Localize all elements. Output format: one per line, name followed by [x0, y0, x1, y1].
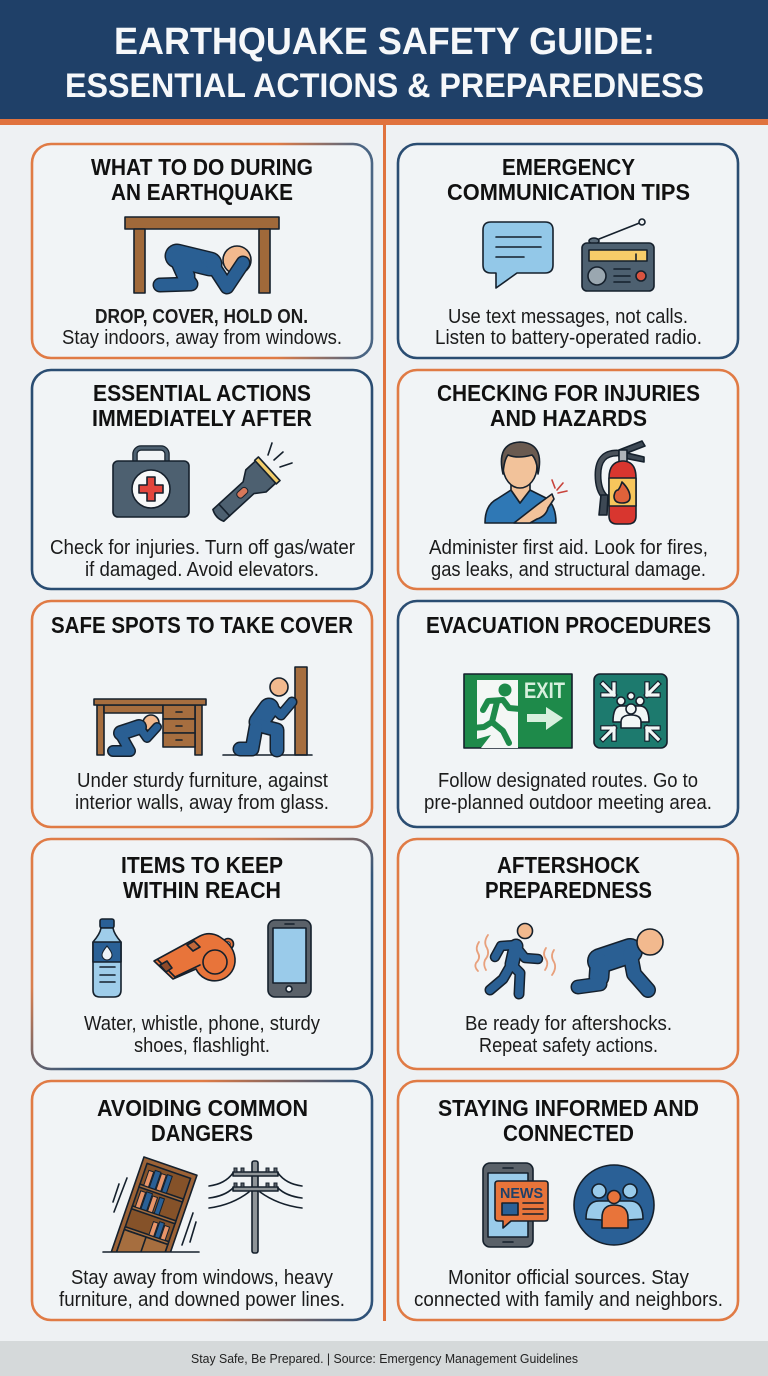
heading: ITEMS TO KEEP	[121, 852, 283, 878]
icon: fire extinguisher	[598, 441, 645, 524]
heading: IMMEDIATELY AFTER	[92, 405, 312, 431]
panel: emergency communication tips	[398, 144, 738, 358]
icon: falling bookcase	[102, 1156, 200, 1253]
body text: Be ready for aftershocks.	[465, 1013, 672, 1035]
icon: person under table	[125, 217, 279, 293]
body text	[75, 770, 329, 814]
icon: smartphone	[268, 920, 311, 997]
body text: Under sturdy furniture, against	[77, 770, 328, 792]
body text: Monitor official sources. Stay	[448, 1267, 689, 1289]
footer	[0, 1341, 768, 1376]
body text	[465, 1013, 672, 1057]
heading: EMERGENCY	[502, 154, 635, 180]
icon: phone with news: NEWS	[500, 1185, 543, 1202]
icon: walking person with shake lines	[475, 924, 555, 994]
heading: CONNECTED	[503, 1120, 634, 1146]
icon: flashlight	[206, 443, 292, 529]
icon: radio	[582, 219, 654, 291]
icon: injured person	[485, 442, 567, 523]
body text	[62, 306, 342, 349]
panel: essential actions immediately after	[32, 370, 372, 589]
body text: connected with family and neighbors.	[414, 1289, 723, 1311]
panel: avoiding common dangers	[32, 1081, 372, 1320]
body text: Repeat safety actions.	[479, 1035, 658, 1057]
panel: aftershock preparedness	[398, 839, 738, 1069]
center divider	[383, 125, 386, 1321]
heading	[447, 154, 690, 205]
heading	[485, 852, 652, 903]
heading: STAYING INFORMED AND	[438, 1095, 699, 1121]
body text	[424, 770, 712, 814]
icon: crouching person	[578, 929, 663, 990]
body text	[414, 1267, 723, 1311]
footer: Stay Safe, Be Prepared. | Source: Emergency Management Guidelines	[191, 1351, 578, 1366]
heading: EVACUATION PROCEDURES	[426, 612, 711, 638]
heading: AND HAZARDS	[490, 405, 647, 431]
icon: chat bubble	[483, 222, 553, 288]
body text: interior walls, away from glass.	[75, 792, 329, 814]
body text: Check for injuries. Turn off gas/water	[50, 537, 355, 559]
icon: person against wall	[223, 667, 312, 755]
icon: person under desk	[94, 699, 206, 755]
heading: AVOIDING COMMON	[97, 1095, 308, 1121]
body text: Stay indoors, away from windows.	[62, 327, 342, 349]
body text: Follow designated routes. Go to	[438, 770, 698, 792]
icon: first aid kit	[113, 448, 189, 517]
body text: Stay away from windows, heavy	[71, 1267, 333, 1289]
panel: evacuation procedures	[398, 601, 738, 827]
heading	[97, 1095, 308, 1146]
body text	[59, 1267, 345, 1311]
body text: furniture, and downed power lines.	[59, 1289, 345, 1311]
heading	[92, 380, 312, 431]
body text	[84, 1013, 320, 1057]
body text: Water, whistle, phone, sturdy	[84, 1013, 320, 1035]
body text: Listen to battery-operated radio.	[435, 327, 702, 349]
heading: SAFE SPOTS TO TAKE COVER	[51, 612, 353, 638]
header banner	[0, 0, 768, 125]
body text: if damaged. Avoid elevators.	[85, 559, 319, 581]
body text	[50, 537, 355, 581]
heading: WITHIN REACH	[123, 877, 281, 903]
title: ESSENTIAL ACTIONS & PREPAREDNESS	[65, 67, 704, 105]
body text: Administer first aid. Look for fires,	[429, 537, 708, 559]
icon: exit sign	[464, 674, 572, 748]
panel: safe spots to take cover	[32, 601, 372, 827]
heading: PREPAREDNESS	[485, 877, 652, 903]
body text: Use text messages, not calls.	[448, 306, 688, 328]
panel: checking for injuries and hazards	[398, 370, 738, 589]
body text: pre-planned outdoor meeting area.	[424, 792, 712, 814]
icon: whistle	[154, 934, 235, 981]
heading	[438, 1095, 699, 1146]
heading: AFTERSHOCK	[497, 852, 640, 878]
heading: WHAT TO DO DURING	[91, 154, 313, 180]
icon: exit sign: EXIT	[524, 678, 565, 703]
heading: DANGERS	[151, 1120, 253, 1146]
icon: assembly point	[594, 674, 667, 748]
title	[65, 21, 704, 105]
body text	[429, 537, 708, 581]
icon: water bottle	[93, 919, 121, 997]
icon: phone with news	[483, 1163, 548, 1247]
body text: gas leaks, and structural damage.	[431, 559, 706, 581]
body text	[435, 306, 702, 349]
heading	[437, 380, 700, 431]
panel: items to keep within reach	[32, 839, 372, 1069]
icon: power pole	[209, 1161, 302, 1253]
heading: ESSENTIAL ACTIONS	[93, 380, 311, 406]
icon: community circle	[574, 1165, 654, 1245]
panel: what to do during an earthquake	[32, 144, 372, 358]
panel: staying informed and connected	[398, 1081, 738, 1320]
body text: DROP, COVER, HOLD ON.	[95, 306, 308, 328]
heading: AN EARTHQUAKE	[111, 179, 293, 205]
title: EARTHQUAKE SAFETY GUIDE:	[114, 21, 655, 63]
heading: CHECKING FOR INJURIES	[437, 380, 700, 406]
heading	[91, 154, 313, 205]
heading	[121, 852, 283, 903]
body text: shoes, flashlight.	[134, 1035, 270, 1057]
heading: COMMUNICATION TIPS	[447, 179, 690, 205]
